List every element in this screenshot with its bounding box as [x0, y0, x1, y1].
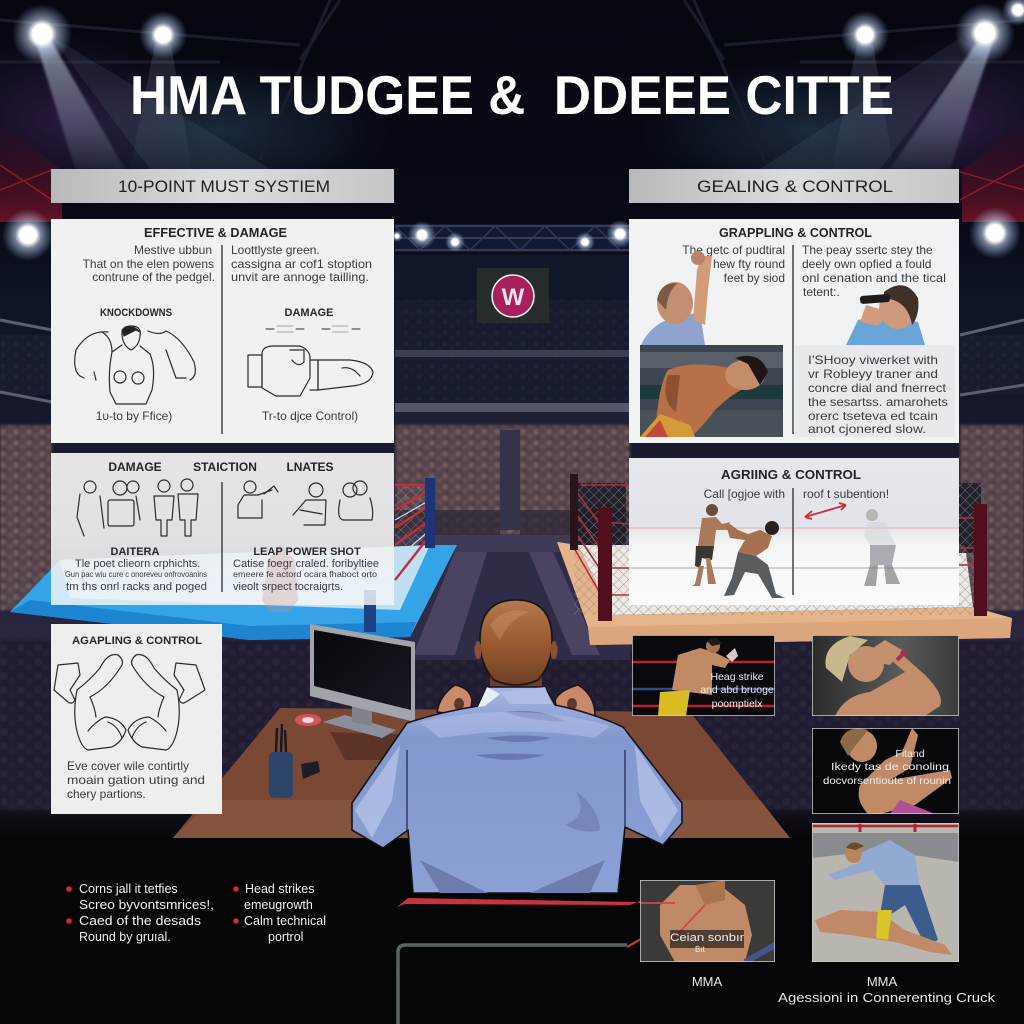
icon: red arrow	[805, 503, 846, 519]
scoreboard logo: W	[502, 284, 525, 311]
left text block: Tle poet clieorn crphichts.	[75, 558, 200, 570]
left text block: feet by siod	[724, 271, 785, 285]
text block on shaded panel: vr Robleyy traner and	[808, 367, 938, 381]
left text block: The getc of pudtiral	[682, 243, 785, 257]
icon: glove and fist	[248, 326, 373, 396]
text block on shaded panel: orerc tseteva ed tcain	[808, 409, 938, 423]
icon: group of judges left	[77, 479, 198, 536]
left text block: hew fty round	[713, 257, 785, 271]
station heading: STAICTION	[193, 460, 257, 474]
photo: fighter with yellow shorts	[632, 635, 775, 716]
text block on shaded panel: I'SHooy viwerket with	[808, 353, 938, 367]
left text block	[83, 243, 215, 284]
panel heading: AGAPLING & CONTROL	[72, 635, 202, 647]
arena floor	[395, 535, 630, 660]
left caption: Call [ogjoe with	[704, 487, 785, 501]
faded figure behind panel	[262, 545, 298, 612]
left text block: Mestive ubbun	[134, 243, 212, 257]
right text block: Loottlyste green.	[231, 243, 320, 257]
panel: damage statistics	[51, 453, 394, 612]
caption: mma right: Agessioni in Connerenting Cruck	[778, 990, 996, 1005]
panel: grappling arms	[51, 624, 222, 814]
lnates heading: LNATES	[286, 460, 334, 474]
title: HMA TUDGEE & DDEEE CITTE	[130, 64, 894, 126]
left text block: tm ths onrl racks and poged	[66, 581, 207, 593]
panel heading: EFFECTIVE & DAMAGE	[144, 225, 287, 240]
text block	[67, 759, 205, 801]
photo: covered fighter with caption: Bıt	[695, 945, 706, 954]
referee with binoculars	[846, 285, 925, 345]
left text block: contrune of the pedgel.	[92, 270, 215, 284]
right subheading: LEAP POWER SHOT	[253, 546, 361, 558]
header: 10-point must system	[51, 169, 394, 203]
icon: knockdown figure	[75, 326, 195, 404]
bullet list left: Round by gruıal.	[79, 930, 171, 944]
right text block	[233, 558, 379, 593]
photo: fighter with yellow shorts: and abd bruoge	[700, 684, 774, 696]
right text block: Catise foegr craled. foribyltiee	[233, 558, 379, 570]
referee raising arm	[641, 251, 712, 345]
bullet list right: Calm technical	[244, 914, 326, 928]
photo: fighter leaning	[640, 345, 783, 437]
bullet list left: Corns jall it tetfies	[79, 882, 178, 896]
text block on shaded panel: anot cjonered slow.	[808, 422, 926, 436]
red truss sides	[0, 125, 1024, 222]
chair	[397, 898, 700, 1024]
beams	[36, 42, 125, 169]
left caption: 1υ-to by Ffice)	[96, 409, 172, 423]
bullet list left: Caed of the desads	[79, 914, 201, 928]
fighter centre	[724, 521, 785, 598]
lamps	[12, 4, 72, 64]
photo: shirtless fighter with caption: Fitand	[895, 748, 925, 760]
photo: referee over downed fighter	[812, 823, 959, 962]
left boxing ring	[10, 478, 457, 640]
panel: cage fight	[629, 458, 959, 605]
left subheading: DAITERA	[111, 546, 159, 558]
left text block: That on the elen powens	[83, 257, 214, 271]
right text block: deely own opfied a fould	[802, 257, 931, 271]
left text block	[65, 558, 207, 593]
right text block: unvit are annoge tailling.	[231, 270, 369, 284]
photo: blond fighter	[812, 635, 959, 716]
right text block: cassigna ar cof1 stoption	[231, 257, 372, 271]
text block: moain gation uting and	[67, 773, 205, 787]
text block on shaded panel	[795, 345, 955, 437]
right text block: vieolt srpect tocraigrts.	[233, 581, 343, 593]
right text block	[231, 243, 372, 284]
photo: shirtless fighter with caption: docvorsentioute of rounin	[823, 775, 951, 787]
header: gealing and control	[629, 169, 959, 203]
text block: Eve cover wile contirtly	[67, 759, 189, 773]
caption: mma right: MMA	[867, 974, 897, 989]
right text block: The peay ssertc stey the	[802, 243, 933, 257]
fighter right faded	[864, 509, 900, 586]
photo: shirtless fighter with caption: Ikedy tas de conoling	[831, 761, 949, 773]
header: 10-point must system: 10-POINT MUST SYSTIEM	[118, 177, 330, 196]
caption: mma left: MMA	[692, 974, 722, 989]
right text block: emeere fe actord ocara fhaboct orto	[233, 569, 377, 579]
scoreboard logo	[477, 268, 549, 323]
damage label: DAMAGE	[285, 307, 333, 319]
panel heading: AGRIING & CONTROL	[721, 467, 861, 482]
right text block: tetent:.	[803, 285, 840, 299]
centre light truss	[395, 224, 630, 252]
text block: chery partions.	[67, 787, 146, 801]
right text block	[802, 243, 946, 299]
right cage ring	[557, 474, 1012, 645]
left text block	[682, 243, 785, 285]
caption: mma right	[778, 974, 996, 1005]
text block on shaded panel: concre dial and fnerrect	[808, 381, 947, 395]
header: gealing and control: GEALING & CONTROL	[697, 177, 893, 196]
right caption: roof t subention!	[803, 487, 889, 501]
panel: effective and damage	[51, 219, 394, 443]
bullet list left	[66, 882, 214, 944]
panel: grappling and control	[629, 219, 959, 443]
damage heading: DAMAGE	[108, 460, 162, 474]
right text block: onl cenation and the tical	[802, 271, 946, 285]
bullet list right: portrol	[268, 930, 303, 944]
photo: fighter with yellow shorts: poomptielx	[712, 698, 763, 710]
bullet list left: Screo byvontsmrices!,	[79, 898, 214, 912]
left text block: Gun pac wiu cure c onoreveu onfrovoanins	[65, 570, 207, 579]
desk items	[269, 714, 321, 798]
photo: covered fighter with caption: Ceian sonbır	[670, 932, 744, 944]
bullet list right	[233, 882, 326, 944]
photo: shirtless fighter with caption	[812, 728, 959, 814]
icon: group of judges right	[238, 481, 373, 525]
truss top	[0, 0, 1024, 160]
photo: covered fighter with caption	[640, 880, 775, 962]
panel heading: GRAPPLING & CONTROL	[719, 225, 872, 240]
bullet list right: Head strikes	[245, 882, 314, 896]
judge seen from behind	[352, 600, 682, 893]
bullet list right: emeugrowth	[244, 898, 313, 912]
icon: arms diagram	[54, 655, 205, 750]
text block on shaded panel: the sesartss. amarohets	[808, 395, 948, 409]
knockdowns label: KNOCKDOWNS	[100, 307, 172, 319]
monitor	[310, 624, 415, 738]
judge desk	[173, 708, 790, 838]
fighter left	[692, 504, 730, 586]
right caption: Tr-to djce Control)	[262, 409, 358, 423]
photo: fighter with yellow shorts: Heag strike	[710, 671, 764, 683]
